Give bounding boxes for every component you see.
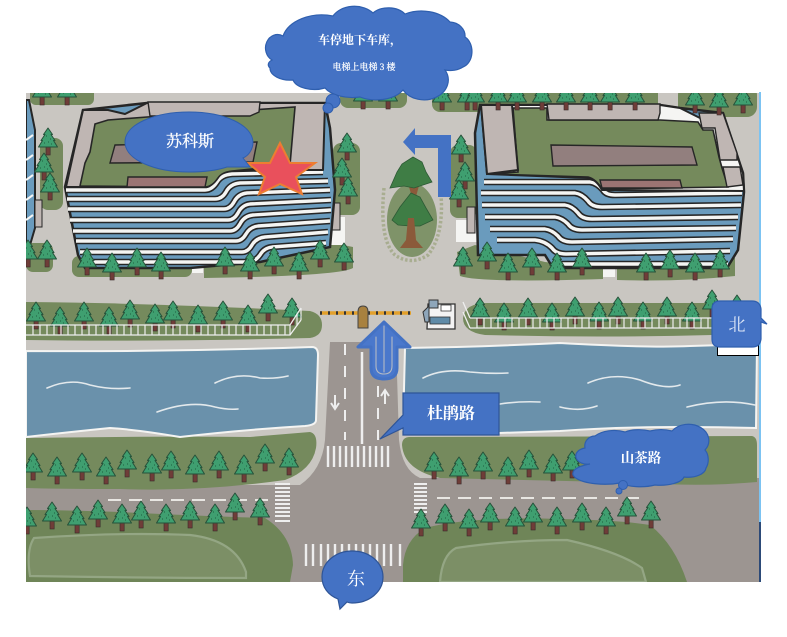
central island with trees [383,157,441,260]
map background [18,78,760,582]
floors [481,182,742,264]
callout: parking cloud: 车停地下车库， [318,32,402,47]
lower right edge [759,522,761,582]
floors [66,172,331,262]
guard house [423,300,455,329]
left side building [26,100,42,245]
roads [26,342,760,582]
callout: parking cloud [265,6,472,113]
river ripples [47,371,755,412]
callout: company name [125,112,253,172]
callout: Dujuan road: 杜鹃路 [427,404,475,422]
roof [481,105,744,191]
compass: north [712,301,767,347]
callout: Dujuan road [380,393,499,439]
right edge of map [759,92,761,522]
star marker [248,143,315,194]
entry arrow [358,322,410,379]
callout: Shancha road cloud [573,424,709,494]
compass: north: 北 [728,316,746,334]
callout: parking cloud: 电梯上电梯 3 楼 [332,61,396,72]
barrier gate [320,306,411,328]
compass: east: 东 [347,569,365,589]
left river [26,347,318,437]
callout: company name: 苏科斯 [166,132,214,150]
callout: Shancha road cloud: 山茶路 [621,450,662,466]
compass: east [322,551,383,609]
fences [26,302,712,335]
roof [66,103,325,187]
compass: north label backing [718,345,758,356]
building: opposite office [456,104,744,277]
right river [403,343,757,433]
lower right lawn [403,518,687,582]
lawns [26,85,757,490]
turn arrow [403,128,451,197]
building: Suzhou office [65,102,345,273]
lower left lawn [26,510,293,582]
trees [18,78,752,536]
